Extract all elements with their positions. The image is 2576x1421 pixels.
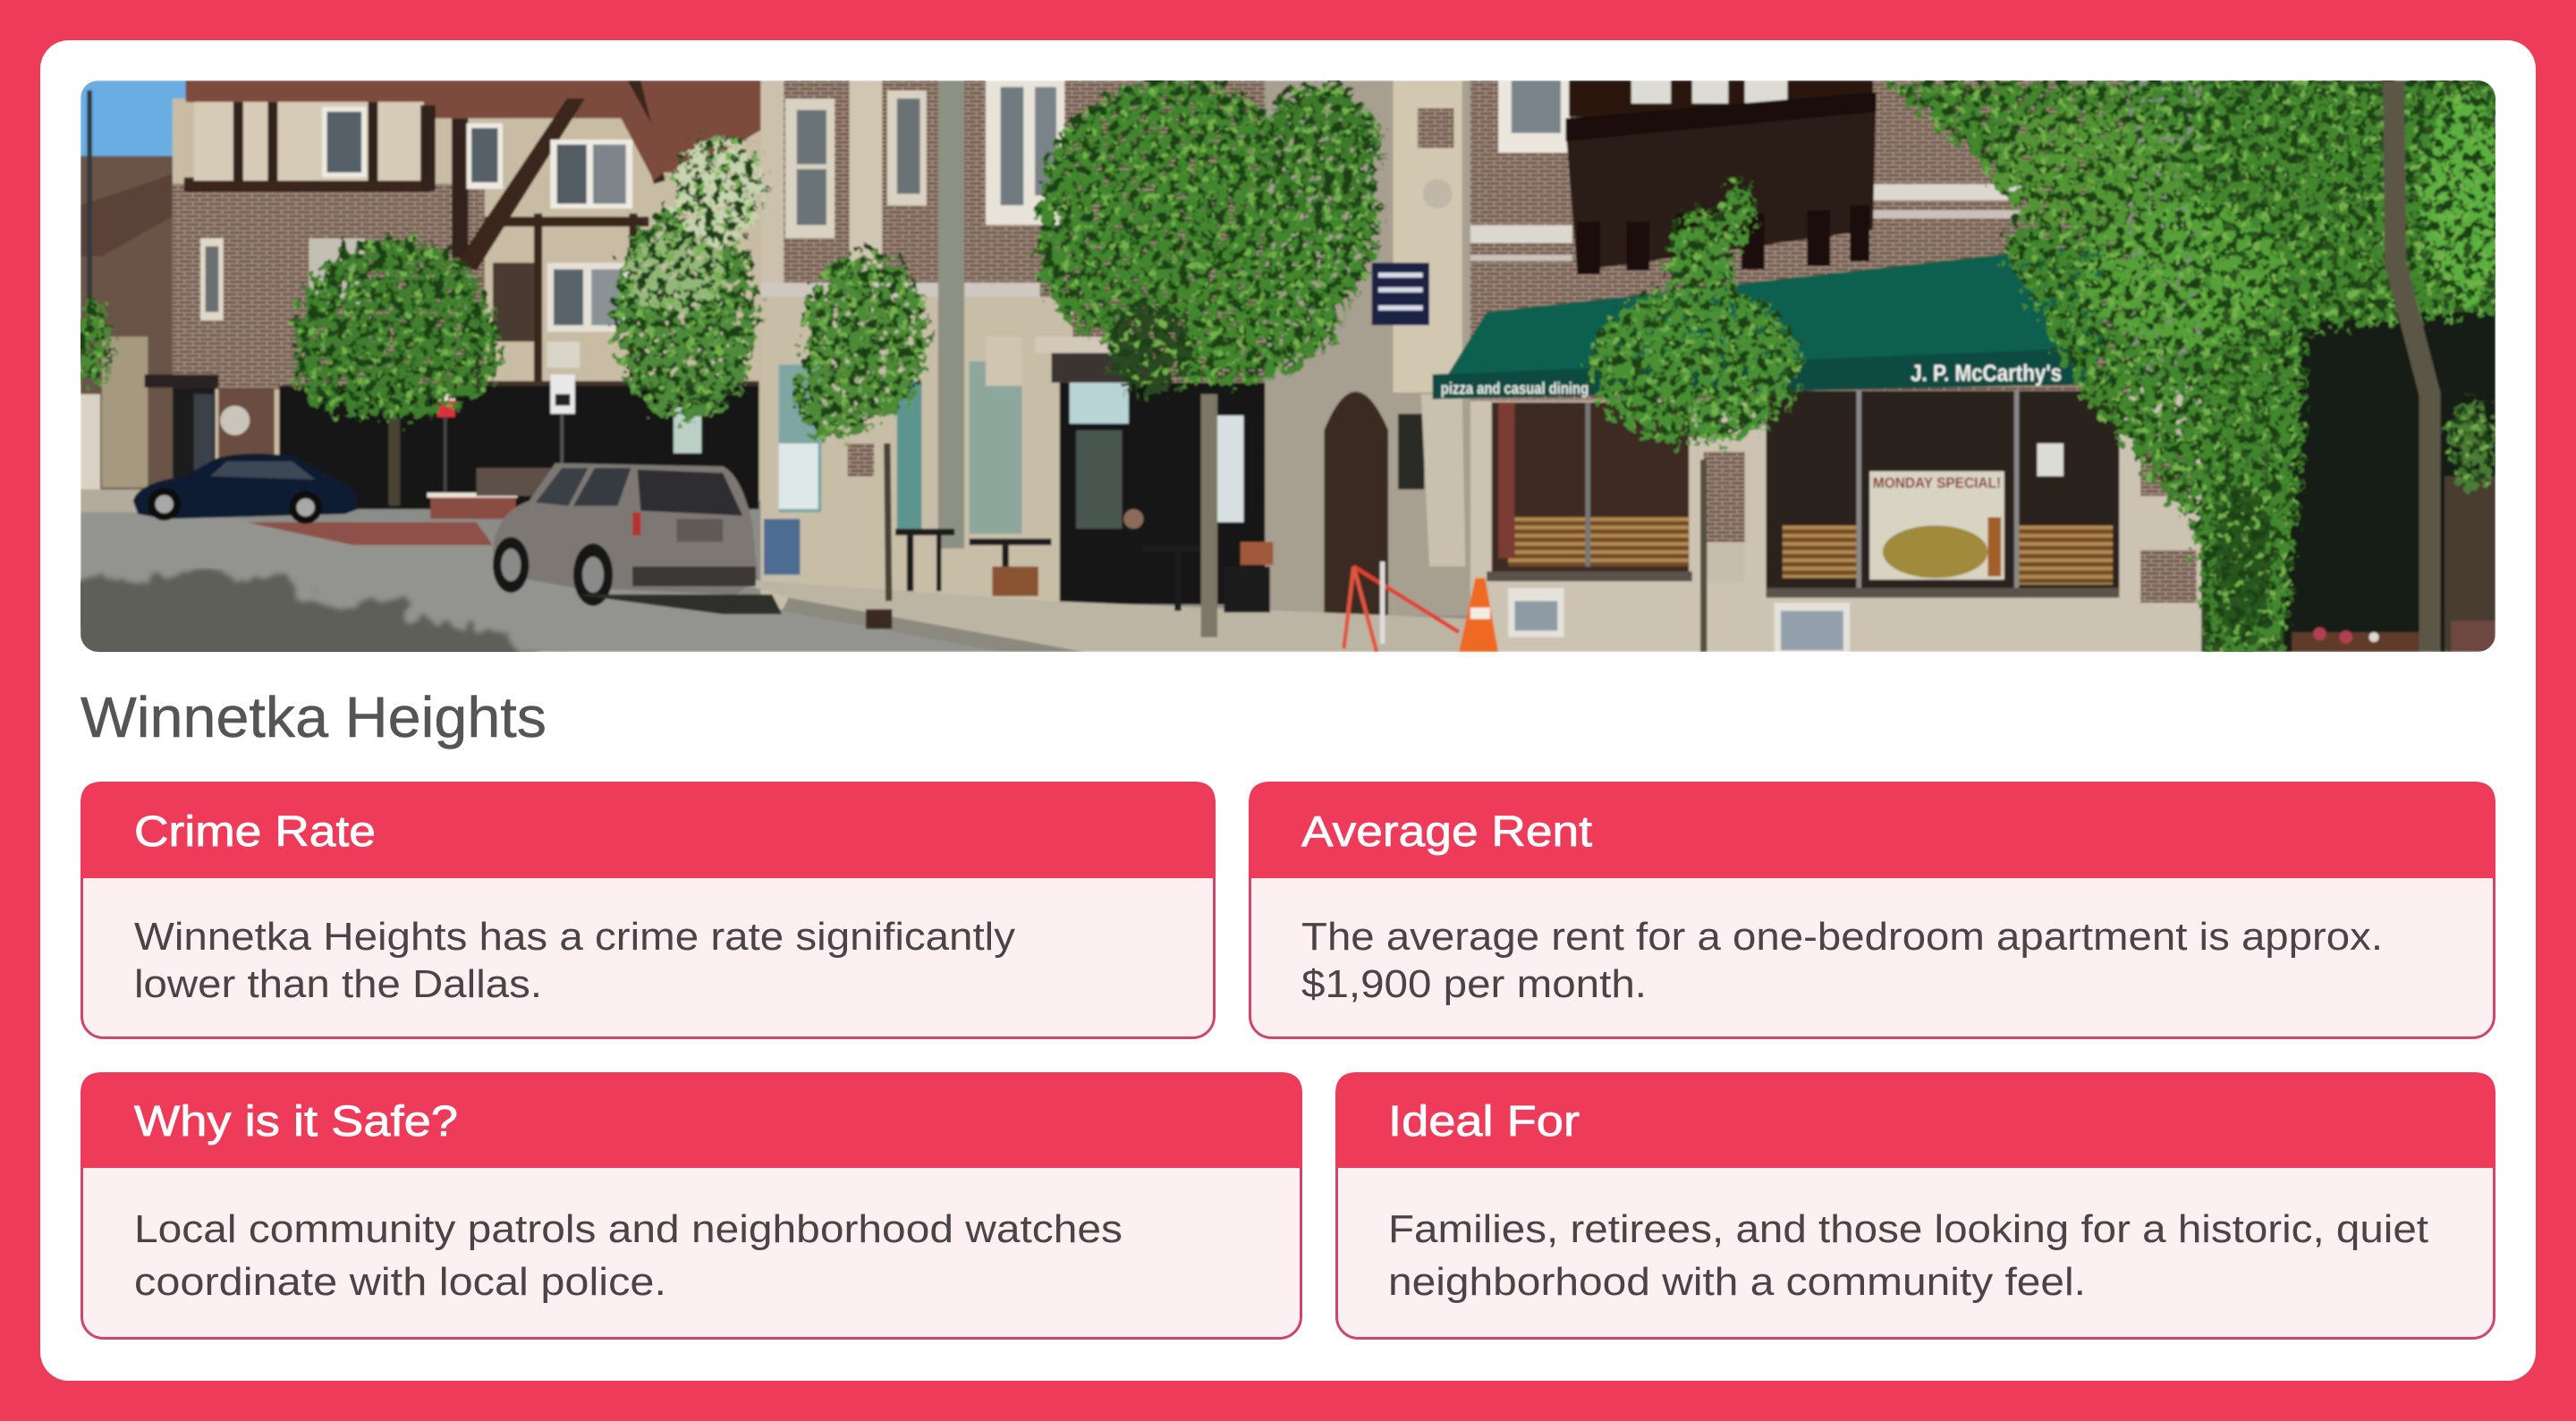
right foliage highlights xyxy=(1987,90,2504,640)
plaza and planter xyxy=(80,468,555,546)
why is it safe header xyxy=(80,1072,1302,1168)
small tree near downspout xyxy=(795,251,928,440)
tudor building xyxy=(145,80,772,509)
crime rate heading: Crime Rate xyxy=(134,808,376,856)
average rent body: $1,900 per month. xyxy=(1301,962,1647,1006)
street signs xyxy=(437,342,701,496)
road xyxy=(82,512,986,651)
navy for rent sign xyxy=(1372,263,1429,326)
monday special poster xyxy=(1869,471,2004,579)
storefront windows xyxy=(1487,391,2197,603)
crime rate body: Winnetka Heights has a crime rate significantly xyxy=(134,915,1015,959)
crime rate body: lower than the Dallas. xyxy=(134,962,542,1006)
front young tree xyxy=(1590,181,1801,444)
card: ideal for xyxy=(1335,1072,2496,1338)
trees xyxy=(72,77,2496,652)
green awning: pizza and casual dining xyxy=(1441,379,1589,398)
brick apartment building xyxy=(760,80,1475,621)
green awning: J. P. McCarthy's xyxy=(1911,361,2062,386)
why is it safe body: Local community patrols and neighborhood watches xyxy=(134,1207,1123,1251)
left edge tree xyxy=(72,299,112,385)
card: why is it safe xyxy=(80,1072,1302,1338)
brick building with dark bay window xyxy=(1470,80,2128,401)
dark right corner behind foliage xyxy=(2201,80,2496,652)
stone storefront wall xyxy=(1470,386,2209,652)
crime rate header xyxy=(80,782,1216,878)
sidewalk and curb xyxy=(723,578,1479,652)
ideal for body: Families, retirees, and those looking for a historic, quiet xyxy=(1388,1207,2428,1251)
tree shadow on road xyxy=(80,568,565,652)
ideal for header xyxy=(1335,1072,2496,1168)
sky xyxy=(80,80,188,157)
far left building xyxy=(80,89,174,490)
green awning xyxy=(1433,243,2103,399)
traffic cone and barrier xyxy=(1343,562,1498,652)
cafe tables xyxy=(764,509,1273,613)
monday special poster: MONDAY SPECIAL! xyxy=(1873,474,2001,491)
white blossom tree xyxy=(614,136,766,420)
card: average rent xyxy=(1249,782,2496,1037)
ideal for heading: Ideal For xyxy=(1388,1098,1580,1146)
average rent heading: Average Rent xyxy=(1301,808,1592,856)
street photo of Winnetka Heights storefronts xyxy=(65,77,2504,673)
why is it safe body: coordinate with local police. xyxy=(134,1260,666,1304)
title: Winnetka Heights xyxy=(80,685,547,749)
large centre tree xyxy=(1035,77,1382,394)
tree trunks xyxy=(394,80,2430,652)
grey suv xyxy=(493,463,782,614)
average rent body: The average rent for a one-bedroom apartment is approx. xyxy=(1301,915,2383,959)
right ivy foliage xyxy=(1883,80,2496,652)
ideal for body: neighborhood with a community feel. xyxy=(1388,1260,2086,1304)
basement windows xyxy=(1508,588,1850,652)
left street tree xyxy=(292,238,503,419)
why is it safe heading: Why is it Safe? xyxy=(134,1098,458,1146)
card: crime rate xyxy=(80,782,1216,1037)
black sedan xyxy=(133,453,358,524)
average rent header xyxy=(1249,782,2496,878)
